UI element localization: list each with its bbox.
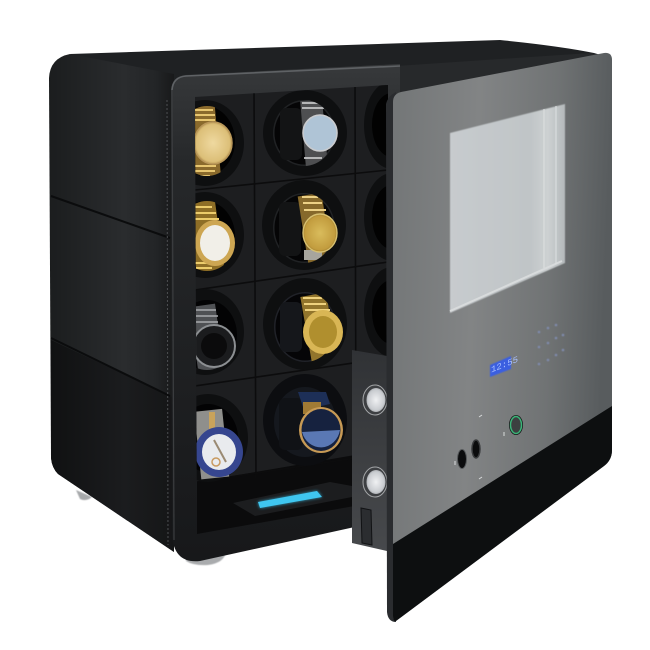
cabinet left side panel <box>49 54 174 552</box>
black band <box>393 406 612 621</box>
interior shelf <box>197 450 388 534</box>
winder: column 1 row 2 <box>196 192 244 278</box>
illustration: watch winder safe cabinet with open door <box>49 40 612 622</box>
watch: black dive <box>196 304 236 370</box>
bay group: seams and winders <box>195 85 388 482</box>
winder: column 1 row 3 <box>196 289 244 375</box>
watch: white dial gold bezel <box>196 201 235 271</box>
stitching on corner <box>167 100 168 545</box>
winder: column 3 row 3 <box>364 268 386 356</box>
stitched seam: upper <box>51 196 170 238</box>
watch: gold champagne dial <box>298 193 337 266</box>
cushion <box>280 108 302 160</box>
winder: column 2 row 3 <box>263 278 347 370</box>
watch: blue bezel <box>194 409 243 479</box>
winder: column 3 row 2 <box>364 174 386 260</box>
keypad dots <box>538 324 564 365</box>
hinge button upper <box>363 385 387 415</box>
winder: column 2 row 2 <box>262 180 346 270</box>
winder: column 1 row 4 <box>196 394 248 481</box>
hinge plate <box>352 350 387 551</box>
seams between winders <box>195 86 388 482</box>
cushion <box>279 202 301 256</box>
foot: front <box>186 552 226 565</box>
watch: gold president <box>300 292 343 364</box>
blue digital display: 12:55 <box>491 354 518 376</box>
stitched seam: lower <box>51 338 170 396</box>
cabinet top face <box>70 40 604 96</box>
cushion <box>279 398 303 450</box>
watch: navy two-tone dial <box>298 392 343 453</box>
winder: column 2 row 4 <box>263 374 347 466</box>
winder: column 2 row 1 <box>263 90 347 176</box>
winder: column 1 row 1 <box>195 100 244 186</box>
foot: rear <box>76 490 92 500</box>
control display bezel <box>233 482 352 516</box>
hinge button lower <box>363 467 387 497</box>
winder: column 3 row 1 <box>364 85 388 168</box>
fingerprint sensor <box>509 415 523 435</box>
front frame <box>171 64 400 561</box>
blue control screen <box>258 491 322 508</box>
frame top edge behind door <box>396 53 604 96</box>
watch: gold dial <box>195 106 233 176</box>
watch: silver blue dial <box>300 99 337 167</box>
door glass panel <box>393 53 612 621</box>
cushion <box>280 302 302 352</box>
indicator ticks <box>455 415 504 479</box>
door edge <box>386 92 396 622</box>
key holes <box>458 440 480 468</box>
display window <box>450 104 565 313</box>
interior panel <box>195 85 388 534</box>
latch <box>361 508 372 545</box>
